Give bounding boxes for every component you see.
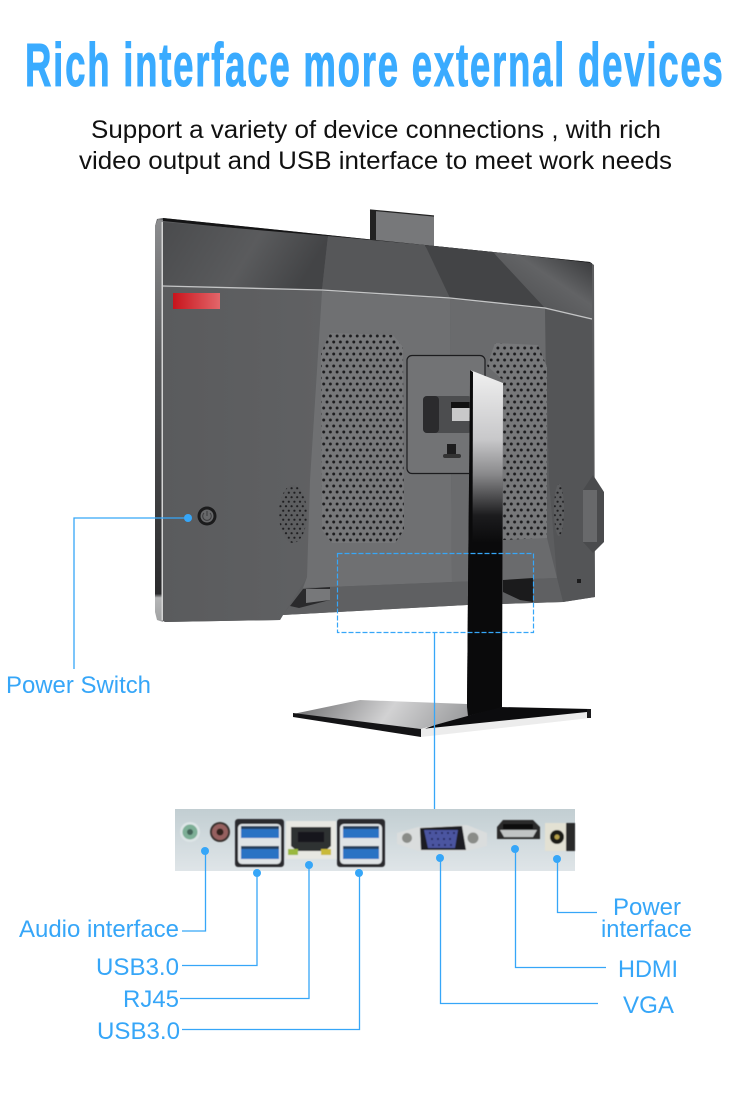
USB ports left	[235, 819, 284, 867]
USB ports right	[337, 819, 385, 867]
red badge	[173, 293, 220, 309]
callout: USB3.0 lower	[97, 869, 363, 1045]
callout: VGA: VGA	[623, 992, 674, 1019]
callout: HDMI: HDMI	[618, 956, 678, 983]
small speaker vent left	[279, 485, 307, 543]
callout: audio interface: Audio interface	[19, 916, 179, 943]
large vent right	[487, 343, 547, 540]
port strip	[175, 809, 575, 871]
callout: USB3.0 upper: USB3.0	[96, 954, 179, 981]
hinge	[423, 396, 472, 458]
VESA mount plate	[407, 356, 485, 474]
audio jacks	[180, 822, 230, 842]
callout: HDMI	[511, 845, 678, 983]
subtitle	[79, 116, 672, 175]
highlight box	[338, 554, 534, 632]
callout: power switch: Power Switch	[6, 672, 151, 699]
small speaker vent right	[554, 484, 564, 536]
VGA port	[397, 825, 487, 851]
subtitle: video output and USB interface to meet work needs	[79, 147, 672, 175]
callout: power interface: interface	[601, 916, 692, 943]
webcam	[370, 210, 434, 246]
base	[293, 700, 591, 737]
callout: power interface	[553, 855, 692, 943]
power button	[198, 506, 216, 526]
monitor with stand	[155, 210, 604, 737]
subtitle: Support a variety of device connections , with rich	[91, 116, 661, 144]
callout: RJ45: RJ45	[123, 986, 179, 1013]
callout: power switch	[6, 514, 192, 699]
title: Rich interface more external devices	[25, 30, 723, 99]
large vent left	[321, 333, 404, 543]
HDMI port	[497, 820, 540, 839]
connector line to ports	[434, 632, 436, 809]
callout: USB3.0 upper	[96, 869, 261, 981]
RJ45 port	[286, 821, 336, 859]
stand neck	[467, 370, 503, 716]
side bump	[583, 475, 604, 553]
callout: VGA	[436, 854, 674, 1019]
power jack	[545, 823, 575, 851]
callout: RJ45	[123, 861, 313, 1013]
callout: power interface: Power	[613, 894, 681, 921]
callout: audio interface	[19, 847, 209, 943]
callout: USB3.0 lower: USB3.0	[97, 1018, 180, 1045]
monitor body	[155, 218, 595, 622]
